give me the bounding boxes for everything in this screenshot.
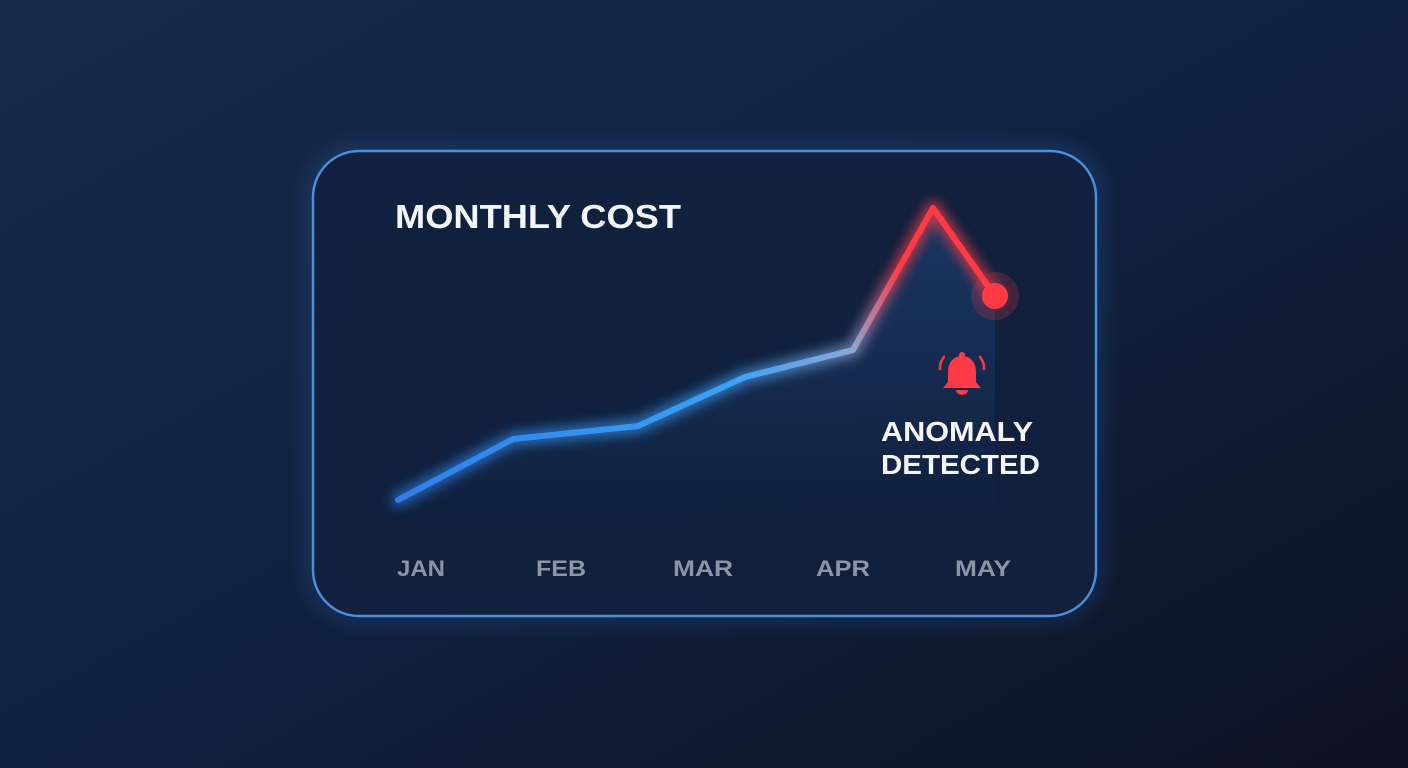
icon: alarm bell — [940, 352, 984, 395]
x-axis labels: APR — [816, 556, 870, 581]
panel: chart card — [313, 151, 1096, 616]
callout: anomaly detected — [881, 416, 1040, 480]
x-axis labels: MAR — [673, 556, 733, 581]
x-axis labels: MAY — [955, 556, 1011, 581]
anomaly point — [971, 272, 1019, 320]
x-axis labels: FEB — [536, 556, 586, 581]
callout: anomaly detected: ANOMALY — [881, 416, 1033, 447]
title: MONTHLY COST — [395, 198, 681, 235]
line chart — [398, 208, 1019, 515]
x-axis labels — [397, 556, 1011, 581]
callout: anomaly detected: DETECTED — [881, 449, 1040, 480]
x-axis labels: JAN — [397, 556, 445, 581]
